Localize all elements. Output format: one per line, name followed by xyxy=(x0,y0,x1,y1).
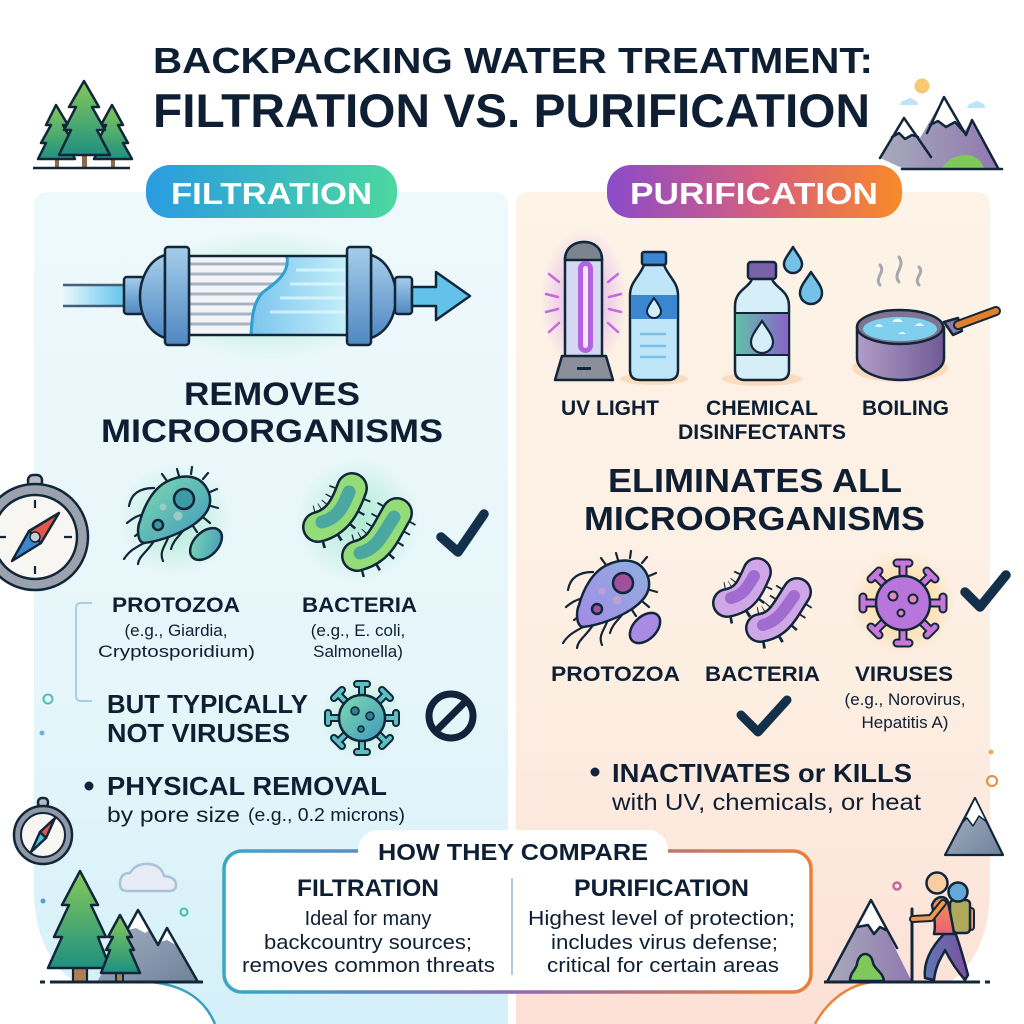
bottom right curve accent xyxy=(815,982,873,1024)
icon: boiling pot xyxy=(852,257,996,382)
label: protozoa: (e.g., Giardia, xyxy=(124,621,228,640)
comparison column: filtration: backcountry sources; xyxy=(264,932,472,954)
icon: pine trees top left xyxy=(33,81,132,168)
comparison column: filtration: removes common threats xyxy=(242,955,495,977)
icon: mountain right xyxy=(945,798,1003,855)
icon: UV lamp xyxy=(540,228,628,380)
label: bacteria: (e.g., E. coli, xyxy=(311,621,405,640)
heading: removes microorganisms xyxy=(101,376,443,449)
text: but typically not viruses: BUT TYPICALLY xyxy=(107,689,308,719)
title xyxy=(153,40,873,137)
heading pill: filtration xyxy=(146,165,397,218)
panel: filtration background xyxy=(34,192,508,1024)
label: protozoa: Cryptosporidium) xyxy=(98,642,255,661)
icon: protozoa green xyxy=(119,464,231,576)
icon: check mark center xyxy=(741,700,787,732)
comparison column: filtration xyxy=(242,875,495,977)
text: but typically not viruses: NOT VIRUSES xyxy=(107,718,290,748)
label: protozoa xyxy=(98,594,255,661)
icon: virus purple xyxy=(851,551,955,655)
heading: removes microorganisms: REMOVES xyxy=(184,376,360,412)
text: inactivates or kills: with UV, chemicals, or heat xyxy=(611,789,922,815)
text: but typically not viruses xyxy=(107,689,308,748)
icon: bacteria purple xyxy=(727,572,797,628)
label: bacteria: BACTERIA xyxy=(302,594,417,617)
label: viruses: Hepatitis A) xyxy=(862,713,948,732)
comparison column: filtration: FILTRATION xyxy=(297,875,439,902)
icon: chemical bottle with drops xyxy=(722,247,822,386)
icon: no symbol xyxy=(429,694,473,738)
icon: virus teal xyxy=(320,676,404,760)
label: viruses: VIRUSES xyxy=(855,663,953,686)
heading pill: filtration: FILTRATION xyxy=(171,176,372,211)
label: protozoa: PROTOZOA xyxy=(112,594,240,617)
icon: hiker xyxy=(824,872,990,982)
icon: check mark filtration xyxy=(441,514,484,552)
icon: check mark viruses xyxy=(965,575,1006,607)
label: viruses: (e.g., Norovirus, xyxy=(845,690,965,709)
comparison heading tab xyxy=(358,830,668,876)
label: bacteria purification: BACTERIA xyxy=(705,663,820,686)
icon: water filter cartridge with arrow xyxy=(63,230,470,362)
text: inactivates or kills xyxy=(590,758,922,815)
comparison column: purification: critical for certain areas xyxy=(547,955,779,977)
label: viruses xyxy=(845,663,965,732)
text: physical removal: by pore size xyxy=(107,804,240,827)
heading pill: purification xyxy=(607,165,902,218)
label: boiling: BOILING xyxy=(862,397,949,420)
heading pill: purification: PURIFICATION xyxy=(630,176,878,211)
label: uv light: UV LIGHT xyxy=(561,397,659,420)
text: physical removal xyxy=(84,771,405,827)
label: chemical disinfectants: DISINFECTANTS xyxy=(678,421,846,444)
icon: mountain with bush bottom right xyxy=(827,900,912,982)
comparison column: purification: Highest level of protection; xyxy=(528,908,795,930)
comparison column: filtration: Ideal for many xyxy=(305,908,431,930)
icon: compass large xyxy=(0,475,88,590)
icon: water bottle xyxy=(620,252,688,385)
text: physical removal: (e.g., 0.2 microns) xyxy=(248,805,405,825)
bracket xyxy=(76,603,92,701)
label: bacteria: Salmonella) xyxy=(313,642,403,661)
icon: protozoa purple xyxy=(563,551,666,649)
comparison box xyxy=(224,830,811,992)
label: chemical disinfectants xyxy=(678,397,846,444)
panel: purification background xyxy=(516,192,990,1024)
comparison column: purification: includes virus defense; xyxy=(551,932,778,954)
comparison column: purification xyxy=(528,875,795,977)
heading: eliminates all microorganisms: ELIMINATES ALL xyxy=(608,462,902,499)
label: bacteria xyxy=(302,594,417,661)
icon: compass small xyxy=(14,798,72,864)
label: protozoa purification: PROTOZOA xyxy=(551,663,680,686)
decorative dots right xyxy=(987,750,997,786)
heading: eliminates all microorganisms: MICROORGANISMS xyxy=(584,500,925,537)
icon: tree and mountain scene bottom left xyxy=(40,864,203,982)
title: BACKPACKING WATER TREATMENT: xyxy=(153,40,873,81)
decorative dots left xyxy=(40,694,52,736)
text: inactivates or kills: INACTIVATES or KILLS xyxy=(612,758,912,788)
label: chemical disinfectants: CHEMICAL xyxy=(706,397,818,420)
heading: eliminates all microorganisms xyxy=(584,462,925,537)
text: physical removal: PHYSICAL REMOVAL xyxy=(107,771,387,801)
bottom left curve accent xyxy=(150,982,215,1024)
heading: removes microorganisms: MICROORGANISMS xyxy=(101,413,443,449)
icon: bacteria green xyxy=(296,458,420,582)
comparison column: purification: PURIFICATION xyxy=(574,875,749,902)
comparison heading tab: HOW THEY COMPARE xyxy=(378,839,648,865)
title: FILTRATION VS. PURIFICATION xyxy=(153,84,870,137)
icon: mountains and sun top right xyxy=(880,78,1002,169)
